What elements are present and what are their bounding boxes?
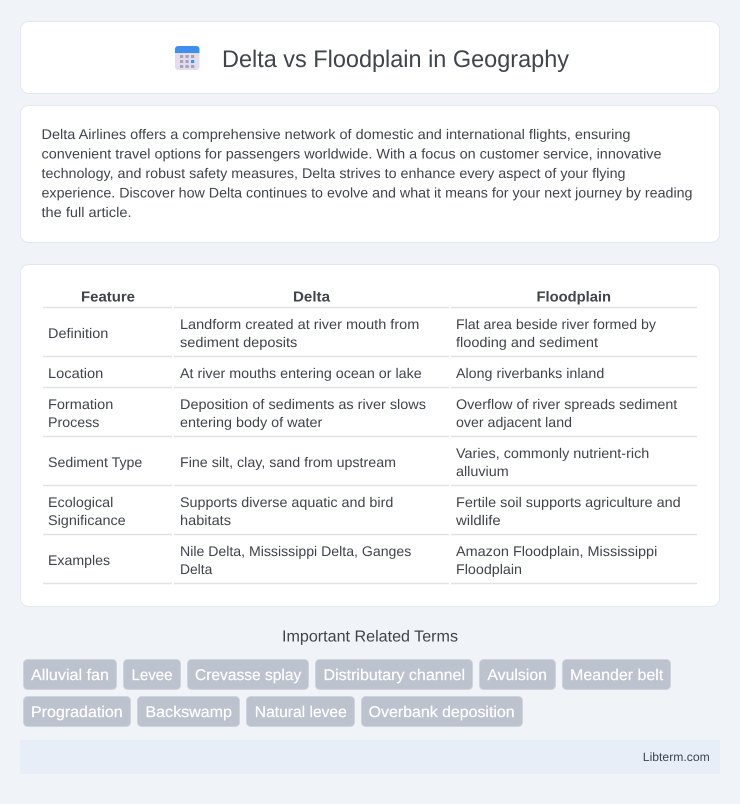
row: sediment type: Fine silt, clay, sand from upstream [180, 454, 396, 470]
tag: backswamp: Backswamp [145, 704, 232, 721]
row: examples [48, 543, 657, 577]
title: Delta vs Floodplain in Geography [222, 46, 569, 73]
row: ecological significance: Fertile soil supports agriculture and [456, 494, 681, 510]
tag: overbank deposition [362, 696, 522, 726]
row: examples: Examples [48, 552, 110, 568]
icon: calendar [175, 46, 200, 70]
footer bar [20, 740, 720, 774]
panel: comparison table [20, 264, 720, 606]
row: ecological significance: Significance [48, 512, 126, 528]
tag: backswamp [138, 696, 240, 726]
tag: natural levee: Natural levee [255, 704, 347, 721]
panel: introduction [20, 106, 720, 242]
row: formation process: Formation [48, 396, 113, 412]
row: formation process: Deposition of sediments as river slows [180, 396, 426, 412]
table column headings: Floodplain [536, 290, 611, 306]
tag: natural levee [246, 696, 354, 726]
related term tags [24, 660, 670, 726]
tag: alluvial fan [24, 660, 116, 690]
table column headings: Feature [81, 290, 135, 306]
intro paragraph: convenient travel options for passengers worldwide. With a focus on customer service, innovative [42, 146, 662, 162]
row: definition: Flat area beside river formed by [456, 316, 656, 332]
table column headings: Delta [293, 290, 331, 306]
panel: header [20, 22, 720, 94]
tag: meander belt: Meander belt [570, 667, 664, 684]
row: sediment type: Varies, commonly nutrient-rich [456, 445, 649, 461]
row: location: At river mouths entering ocean or lake [180, 365, 422, 381]
row: definition: Definition [48, 325, 108, 341]
row: location [48, 365, 604, 381]
row: definition: sediment deposits [180, 334, 297, 350]
row: formation process [48, 396, 677, 430]
tag: progradation [24, 696, 130, 726]
tag: alluvial fan: Alluvial fan [31, 667, 109, 684]
intro paragraph: Delta Airlines offers a comprehensive network of domestic and international flights, ensuring [42, 126, 630, 142]
tag: crevasse splay [188, 660, 308, 690]
row: formation process: entering body of water [180, 414, 323, 430]
row: sediment type: Sediment Type [48, 454, 143, 470]
tag: progradation: Progradation [31, 704, 123, 721]
tag: distributary channel [316, 660, 472, 690]
intro paragraph: the full article. [42, 204, 132, 220]
row: ecological significance: Supports diverse aquatic and bird [180, 494, 393, 510]
row: definition: flooding and sediment [456, 334, 598, 350]
row: sediment type [48, 445, 649, 479]
table column headings [81, 290, 611, 306]
tag: levee: Levee [132, 667, 172, 684]
row: location: Along riverbanks inland [456, 365, 604, 381]
tag: distributary channel: Distributary channel [324, 667, 465, 684]
footer credit: Libterm.com [643, 750, 710, 764]
tag: overbank deposition: Overbank deposition [369, 704, 515, 721]
row: formation process: Overflow of river spreads sediment [456, 396, 677, 412]
intro paragraph: technology, and robust safety measures, Delta strives to enhance every aspect of your flying [42, 165, 626, 181]
row: examples: Amazon Floodplain, Mississippi [456, 543, 657, 559]
tag: meander belt [562, 660, 670, 690]
intro paragraph: experience. Discover how Delta continues to evolve and what it means for your next journey by reading [42, 184, 693, 200]
row: ecological significance: habitats [180, 512, 231, 528]
row: ecological significance [48, 494, 681, 528]
tag: levee [124, 660, 180, 690]
row: ecological significance: wildlife [455, 512, 501, 528]
row: examples: Floodplain [456, 561, 522, 577]
row: definition: Landform created at river mouth from [180, 316, 419, 332]
row: sediment type: alluvium [456, 463, 509, 479]
row: ecological significance: Ecological [48, 494, 113, 510]
tag: crevasse splay: Crevasse splay [195, 667, 302, 684]
row: formation process: Process [48, 414, 99, 430]
row: definition [48, 316, 656, 350]
row: location: Location [48, 365, 103, 381]
row: formation process: over adjacent land [456, 414, 572, 430]
heading: important related terms: Important Related Terms [282, 628, 458, 646]
intro paragraph [42, 126, 693, 220]
row: examples: Nile Delta, Mississippi Delta, Ganges [180, 543, 411, 559]
tag: avulsion [480, 660, 556, 690]
tag: avulsion: Avulsion [487, 667, 547, 684]
row: examples: Delta [180, 561, 213, 577]
